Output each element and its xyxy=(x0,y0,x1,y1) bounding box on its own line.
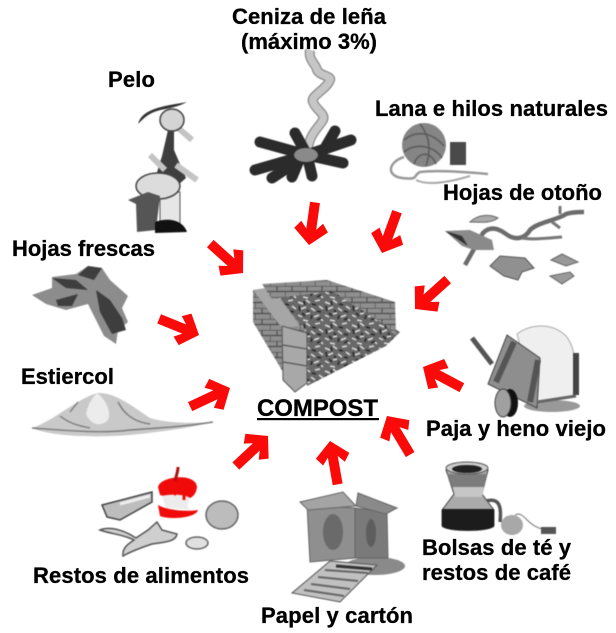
arrow: from Pelo xyxy=(199,231,254,286)
label: máximo 3%: (máximo 3%) xyxy=(241,29,377,54)
arrow: from Restos xyxy=(224,424,280,478)
label: Pelo: Pelo xyxy=(108,67,155,92)
arrow: from Paja xyxy=(415,352,470,403)
arrow: from Bolsas xyxy=(372,407,425,463)
label: Hojas de otoño: Hojas de otoño xyxy=(443,180,602,205)
label: Ceniza de leña: Ceniza de leña xyxy=(232,4,387,29)
icon: compost bin xyxy=(253,280,400,392)
label: Hojas frescas: Hojas frescas xyxy=(12,236,155,261)
arrow: from Ceniza xyxy=(292,200,332,247)
arrow: from Lana xyxy=(366,206,413,259)
icon: wheelbarrow with straw xyxy=(472,326,580,417)
label: COMPOST: COMPOST xyxy=(257,395,378,422)
icon: cardboard box and newspaper xyxy=(292,492,405,602)
label: Estiercol: Estiercol xyxy=(21,364,114,389)
icon: man with hair xyxy=(128,102,197,233)
icon: coffee pot and tea bag xyxy=(442,462,556,535)
arrow: from Estiercol xyxy=(183,373,237,422)
icon: food scraps xyxy=(100,467,238,556)
icon: fresh leaves xyxy=(32,266,128,344)
label: Papel y cartón: Papel y cartón xyxy=(261,603,413,628)
arrow: from Hojas frescas xyxy=(153,303,205,351)
icon: wood ash fire xyxy=(255,50,351,178)
arrow: from Papel xyxy=(313,438,354,487)
label: restos de café: restos de café xyxy=(422,560,571,585)
icon: ball of wool xyxy=(391,123,488,183)
icon: manure heap xyxy=(32,393,213,436)
label: Bolsas de té y: Bolsas de té y xyxy=(422,535,572,560)
label: Lana e hilos naturales: Lana e hilos naturales xyxy=(375,96,608,121)
arrow: from Hojas de otoño xyxy=(404,267,459,322)
label: Restos de alimentos: Restos de alimentos xyxy=(33,563,249,588)
label: Paja y heno viejo: Paja y heno viejo xyxy=(426,416,606,441)
icon: autumn leaves xyxy=(445,206,584,284)
